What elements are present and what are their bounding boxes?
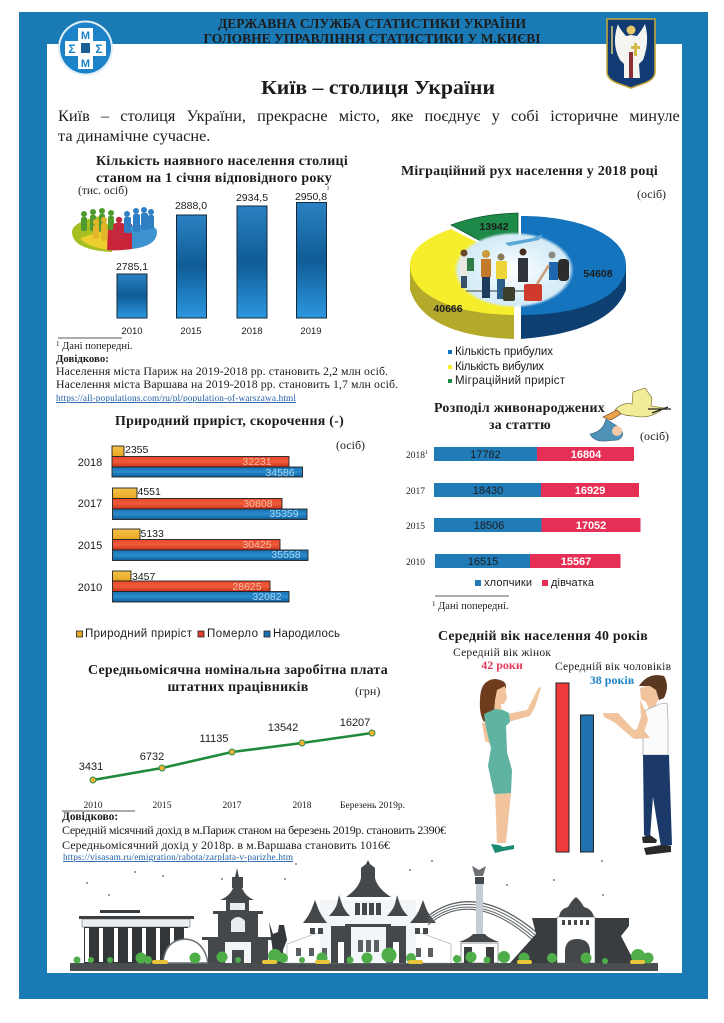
axis labels: 2019: [300, 326, 322, 337]
value labels: 2934,5: [236, 192, 268, 204]
panel: salary line chart: [79, 662, 405, 811]
building: theatre with columns: [79, 910, 208, 963]
boys values: 16515: [468, 556, 498, 568]
value labels: 1: [326, 186, 330, 192]
footnote: births: Дані попередні.: [436, 601, 509, 612]
values: 3431: [79, 761, 103, 773]
reference text: salary: Довідково:: [62, 811, 118, 823]
legend: migration: Міграційний приріст: [455, 375, 566, 387]
deaths values: 32231: [242, 456, 272, 468]
year labels: [406, 450, 428, 568]
icon: statistics service logo: Σ: [68, 42, 76, 56]
natural increase values: 5133: [140, 528, 164, 540]
monument: friendship arch: [428, 902, 568, 963]
points: [90, 730, 375, 783]
year labels: 1: [425, 450, 428, 456]
icon: statistics service logo: М: [81, 30, 90, 42]
axis labels: [84, 801, 405, 811]
label: men age: 38 років: [590, 673, 635, 687]
boys values: 17782: [470, 449, 501, 461]
icon: statistics service logo: [58, 20, 113, 76]
year labels: 2018: [406, 451, 425, 461]
births values: 35359: [269, 508, 299, 520]
girls values: 15567: [561, 556, 591, 568]
reference text: salary: Середньомісячний дохід у 2018р. в м.Варшава становить 1016€: [62, 838, 390, 852]
heading: natural increase: Природний приріст, скорочення (-): [115, 413, 344, 428]
building: cathedral: [287, 860, 451, 963]
intro text: та динамічне сучасне.: [58, 126, 210, 145]
deaths values: 30808: [243, 498, 273, 510]
values: [79, 717, 370, 773]
illustration: man: [603, 675, 672, 855]
births values: 35558: [271, 549, 301, 561]
natural increase values: 3457: [132, 571, 156, 583]
bar: men: [580, 715, 594, 852]
legend: migration: Кількість прибулих: [455, 346, 553, 358]
heading: salary: штатних працівників: [168, 679, 308, 694]
deaths values: 30425: [242, 539, 272, 551]
reference text: salary: https://visasam.ru/emigration/rabota/zarplata-v-parizhe.htm: [63, 853, 294, 863]
birds: [86, 860, 604, 896]
axis labels: 2010: [121, 326, 143, 337]
year labels: 2010: [78, 582, 102, 594]
label: men age: [555, 661, 672, 687]
values: 6732: [140, 751, 164, 763]
births values: 32082: [252, 591, 282, 603]
header: organisation name: ГОЛОВНЕ УПРАВЛІННЯ СТАТИСТИКИ У М.КИЄВІ: [204, 31, 540, 46]
year labels: 2015: [78, 540, 102, 552]
header: organisation name: [204, 16, 540, 46]
reference text: salary: Середній місячний дохід в м.Париж станом на березень 2019р. становить 2390€: [62, 823, 446, 837]
icon: stork carrying baby: [590, 388, 671, 441]
intro text: [58, 106, 680, 145]
axis labels: 2015: [152, 801, 172, 811]
footnote and reference: population: Довідково:: [56, 353, 109, 365]
births values: [252, 467, 301, 603]
births values: 34586: [265, 467, 295, 479]
natural increase values: [125, 444, 164, 583]
heading: births by sex: [434, 400, 605, 432]
legend: births: [475, 577, 595, 589]
axis labels: 2018: [241, 326, 263, 337]
bar: women: [556, 683, 569, 852]
label: women age: [453, 647, 551, 672]
heading: salary: Середньомісячна номінальна заробітна плата: [88, 662, 388, 677]
girls values: 16804: [571, 449, 602, 461]
deaths values: [232, 456, 273, 593]
deaths values: 28625: [232, 581, 262, 593]
3D pie depth: [410, 265, 626, 339]
monument: mother figure: [269, 922, 287, 963]
value labels: 2785,1: [116, 261, 148, 273]
axis labels: 2018: [292, 801, 312, 811]
axis labels: 2015: [180, 326, 202, 337]
year labels: [78, 457, 102, 594]
footnote and reference: population: [56, 338, 398, 404]
icon: statistics service logo: Σ: [95, 42, 103, 56]
icon: people on pie chart: [72, 207, 157, 252]
legend: migration: Кількість вибулих: [455, 361, 544, 373]
panel: natural increase bar chart: [76, 413, 365, 640]
unit label: (осіб): [637, 187, 666, 201]
boys values: [468, 449, 504, 568]
intro text: Київ – столиця України, прекрасне місто, яке поєднує у собі історичне минуле: [58, 106, 680, 125]
panel: average age: [438, 628, 672, 855]
icon: Kyiv coat of arms: [607, 19, 655, 88]
panel: migration pie chart: [401, 163, 666, 387]
unit label: (грн): [355, 684, 380, 698]
year labels: 2015: [406, 522, 425, 532]
legend: births: дівчатка: [551, 577, 595, 589]
footnote and reference: population: 1: [56, 340, 60, 348]
boys values: 18430: [473, 485, 503, 497]
pie slice: migration growth: [451, 213, 518, 244]
natural increase values: 4551: [138, 486, 161, 498]
legend: natural increase: [76, 628, 340, 640]
illustration: woman: [480, 679, 541, 853]
building: bell tower: [202, 868, 273, 963]
orange bars: [112, 446, 140, 581]
heading: population: станом на 1 січня відповідного року: [96, 170, 332, 185]
trees: [74, 948, 654, 964]
panel: population chart: [72, 153, 348, 337]
axis labels: 2010: [84, 801, 103, 811]
label: men age: Середній вік чоловіків: [555, 661, 672, 673]
pie value labels: [433, 221, 613, 315]
reference text: salary: [62, 811, 446, 863]
values: 13542: [268, 722, 298, 734]
heading: population: [96, 153, 348, 185]
values: 11135: [200, 733, 228, 745]
natural increase values: 2355: [125, 444, 149, 456]
icon: statistics service logo: М: [81, 58, 90, 70]
girls values: 17052: [576, 520, 606, 532]
pie slice: arrivals: [521, 216, 626, 315]
legend: natural increase: Народилось: [273, 628, 340, 640]
unit label: (осіб): [336, 438, 365, 452]
legend: natural increase: Померло: [207, 628, 258, 640]
pie value labels: 40666: [433, 303, 463, 315]
footnote and reference: population: Населення міста Варшава на 2019-2018 рр. становить 1,7 млн осіб.: [56, 377, 398, 391]
year labels: 2017: [406, 487, 425, 497]
value labels: 2888,0: [175, 200, 207, 212]
year labels: 2017: [78, 498, 102, 510]
axis labels: Березень 2019р.: [340, 801, 405, 811]
label: women age: 42 роки: [481, 658, 523, 672]
heading: births by sex: за статтю: [489, 417, 551, 432]
title: Київ – столиця України: [261, 78, 495, 99]
footnote and reference: population: https://all-populations.com/ru/pl/population-of-warszawa.html: [56, 393, 296, 404]
boys values: 18506: [474, 520, 504, 532]
legend: natural increase: Природний приріст: [85, 628, 193, 640]
unit label: (тис. осіб): [78, 185, 128, 197]
boys bars: [434, 447, 542, 568]
illustration: Kyiv skyline: [70, 860, 658, 971]
red bars: [112, 456, 289, 592]
pie value labels: 54608: [583, 268, 613, 280]
ground: [70, 963, 658, 971]
heading: average age: Середній вік населення 40 років: [438, 628, 648, 643]
footnote: births: [432, 596, 509, 612]
header: organisation name: ДЕРЖАВНА СЛУЖБА СТАТИСТИКИ УКРАЇНИ: [218, 16, 526, 31]
girls values: 16929: [575, 485, 605, 497]
year labels: 2018: [78, 457, 102, 469]
girls values: [561, 449, 606, 568]
unit label: (осіб): [640, 429, 669, 443]
footnote: births: 1: [432, 600, 436, 608]
value labels: [116, 186, 330, 273]
girls bars: [530, 447, 640, 568]
axis labels: 2017: [222, 801, 242, 811]
heading: population: Кількість наявного населення столиці: [96, 153, 348, 168]
building: Golden Gate: [510, 897, 635, 963]
line: [93, 733, 372, 780]
value labels: 2950,8: [295, 191, 327, 203]
axis labels: [121, 326, 322, 337]
bars: [117, 202, 326, 318]
monument: independence column: [459, 866, 499, 963]
pie slice: departures: [410, 229, 514, 315]
year labels: 2010: [406, 558, 425, 568]
cars: [152, 960, 645, 964]
footnote and reference: population: Населення міста Париж на 2019-2018 рр. становить 2,2 млн осіб.: [56, 364, 388, 378]
pie value labels: 13942: [479, 221, 509, 233]
label: women age: Середній вік жінок: [453, 647, 551, 659]
footnote and reference: population: Дані попередні.: [60, 341, 133, 352]
heading: salary: [88, 662, 388, 694]
panel: births by sex chart: [406, 388, 671, 612]
heading: migration: Міграційний рух населення у 2018 році: [401, 163, 658, 178]
blue bars: [112, 467, 308, 602]
heading: births by sex: Розподіл живонароджених: [434, 400, 605, 415]
airport travellers illustration: [454, 232, 574, 308]
legend: migration: [448, 346, 566, 387]
legend: births: хлопчики: [484, 577, 532, 589]
values: 16207: [340, 717, 370, 729]
